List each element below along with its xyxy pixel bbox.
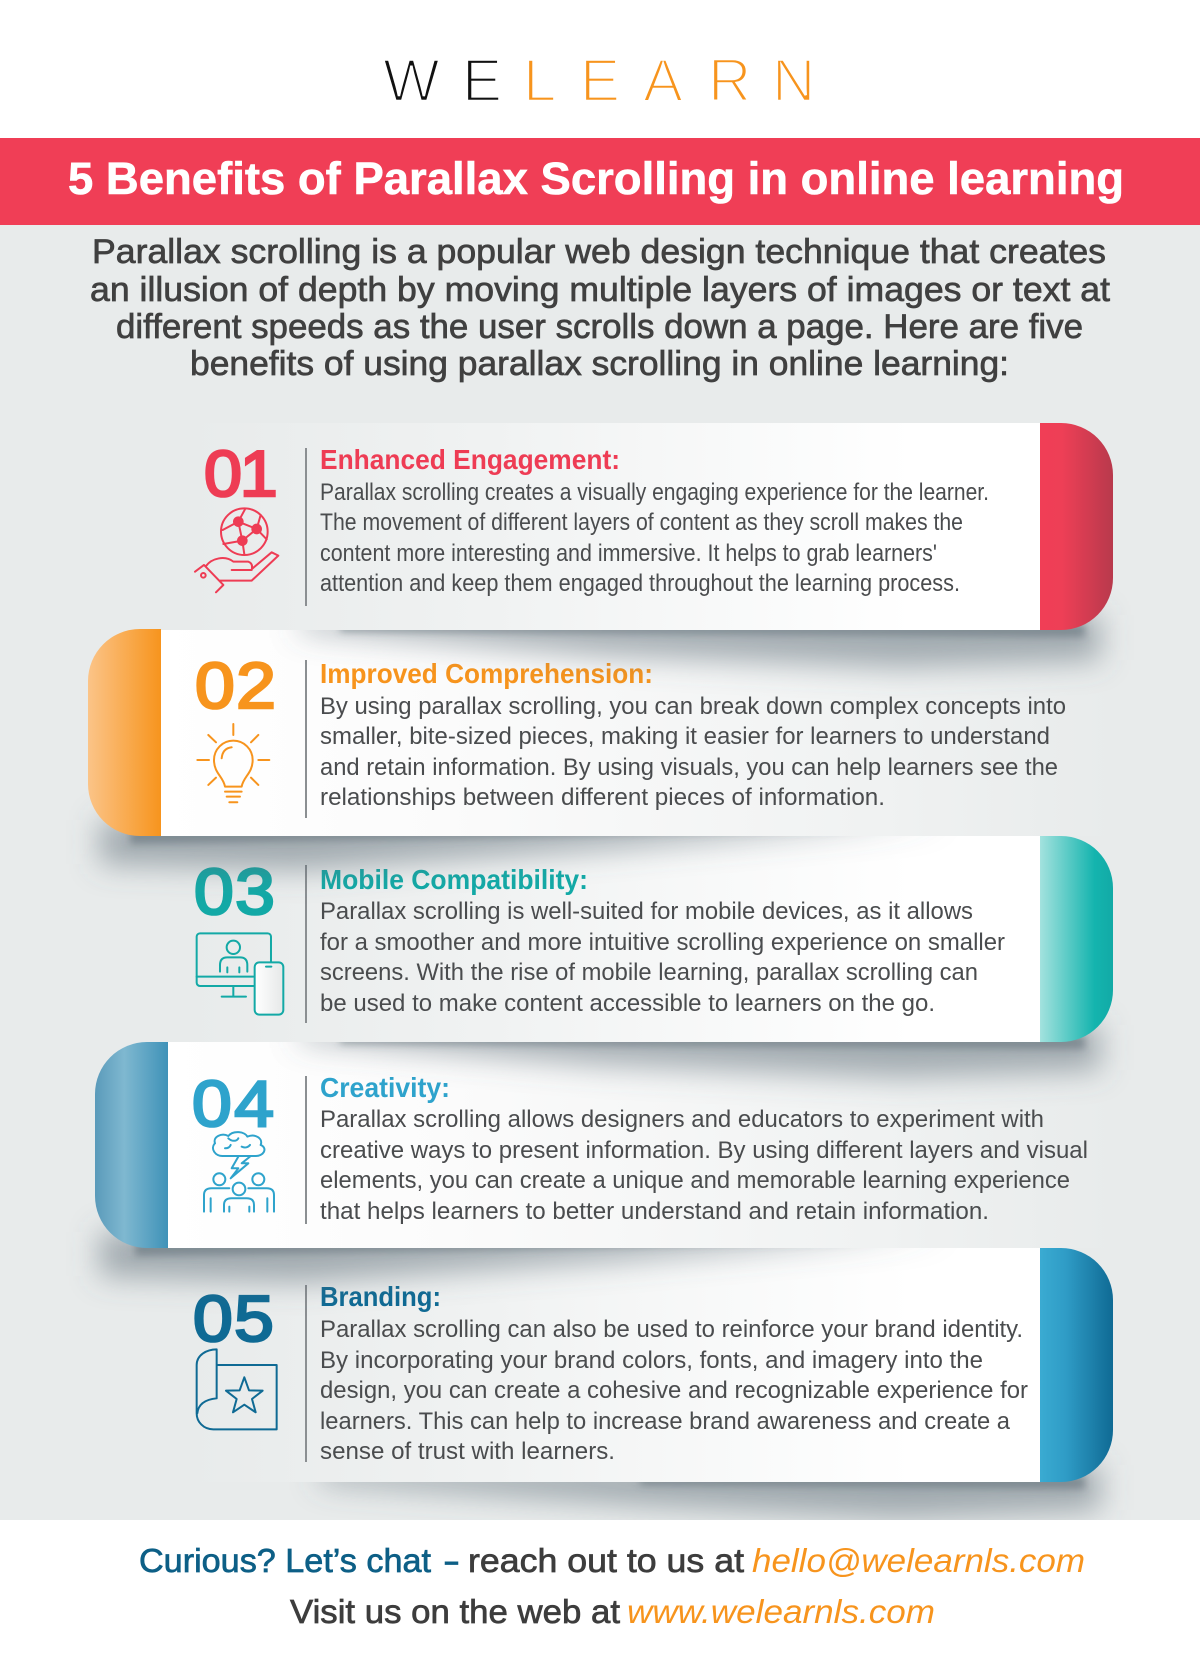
- panel: 03 Mobile Compatibility: [190, 836, 1113, 1042]
- body text 02: relationships between different pieces of information.: [320, 784, 885, 811]
- footer contact text: reach out to us at: [468, 1543, 745, 1580]
- body text 02: smaller, bite-sized pieces, making it easier for learners to understand: [320, 723, 1050, 750]
- logo: WELEARN: WE: [383, 47, 502, 114]
- number 02: 02: [195, 650, 276, 722]
- color cap 01: [1040, 423, 1113, 630]
- color cap 04: [95, 1042, 168, 1248]
- icon: brainstorm group: [204, 1132, 274, 1212]
- intro paragraph: [90, 233, 1110, 383]
- icon: hand holding network globe: [195, 508, 278, 592]
- body text 01: [320, 479, 989, 597]
- body text 02: and retain information. By using visuals, you can help learners see the: [320, 754, 1058, 781]
- number 05: 05: [193, 1283, 274, 1355]
- footer contact text: Visit us on the web at: [290, 1594, 621, 1631]
- heading: Enhanced Engagement: Enhanced Engagement:: [320, 444, 620, 475]
- body text 03: be used to make content accessible to learners on the go.: [320, 990, 935, 1017]
- body text 05: [320, 1316, 1028, 1465]
- body text 02: [320, 693, 1066, 811]
- intro paragraph: benefits of using parallax scrolling in online learning:: [190, 345, 1009, 383]
- body text 05: Parallax scrolling can also be used to reinforce your brand identity.: [320, 1316, 1023, 1343]
- heading: Mobile Compatibility: Mobile Compatibility:: [320, 864, 588, 895]
- icon: desktop and phone: [197, 933, 283, 1015]
- icon: scroll with star: [197, 1349, 277, 1429]
- color cap 05: [1040, 1248, 1113, 1482]
- body text 02: By using parallax scrolling, you can break down complex concepts into: [320, 693, 1066, 720]
- body text 05: learners. This can help to increase brand awareness and create a: [320, 1408, 1010, 1435]
- body text 05: By incorporating your brand colors, fonts, and imagery into the: [320, 1347, 983, 1374]
- body text 03: for a smoother and more intuitive scrolling experience on smaller: [320, 929, 1005, 956]
- footer contact text: www.welearnls.com: [627, 1594, 935, 1631]
- body text 04: elements, you can create a unique and memorable learning experience: [320, 1167, 1070, 1194]
- panel: 05 Branding: [190, 1248, 1113, 1482]
- panel: 02 Improved Comprehension: [88, 629, 1113, 836]
- body text 04: Parallax scrolling allows designers and educators to experiment with: [320, 1106, 1044, 1133]
- body text 01: attention and keep them engaged throughout the learning process.: [320, 570, 960, 597]
- body text 01: The movement of different layers of content as they scroll makes the: [320, 509, 963, 536]
- intro paragraph: Parallax scrolling is a popular web design technique that creates: [92, 233, 1106, 271]
- body text 03: screens. With the rise of mobile learning, parallax scrolling can: [320, 959, 978, 986]
- body text 05: sense of trust with learners.: [320, 1438, 615, 1465]
- heading: Improved Comprehension: Improved Comprehension:: [320, 658, 653, 689]
- title banner: [0, 138, 1200, 225]
- number 03: 03: [194, 856, 275, 928]
- body text 05: design, you can create a cohesive and recognizable experience for: [320, 1377, 1028, 1404]
- body text 04: [320, 1106, 1088, 1225]
- intro paragraph: an illusion of depth by moving multiple layers of images or text at: [90, 271, 1110, 309]
- heading: Branding: Branding:: [320, 1281, 441, 1312]
- color cap 03: [1040, 836, 1113, 1042]
- number 04: 04: [192, 1068, 274, 1140]
- heading: Creativity: Creativity:: [320, 1072, 450, 1103]
- body text 03: [320, 898, 1005, 1017]
- icon: light bulb: [197, 724, 269, 802]
- body text 04: that helps learners to better understand and retain information.: [320, 1198, 989, 1225]
- footer contact text: -: [443, 1543, 460, 1580]
- logo: WELEARN: LEARN: [523, 47, 815, 114]
- footer contact text: Curious? Let’s chat: [139, 1543, 432, 1580]
- body text 04: creative ways to present information. By using different layers and visual: [320, 1137, 1088, 1164]
- panel: 04 Creativity: [95, 1042, 1113, 1248]
- body text 03: Parallax scrolling is well-suited for mobile devices, as it allows: [320, 898, 973, 925]
- number 01: 01: [204, 438, 278, 511]
- footer contact text: hello@welearnls.com: [752, 1543, 1085, 1580]
- color cap 02: [88, 629, 161, 836]
- panel: 01 Enhanced Engagement: [190, 423, 1113, 630]
- footer contact text: [139, 1543, 1085, 1631]
- title banner: 5 Benefits of Parallax Scrolling in online learning: [68, 153, 1124, 204]
- body text 01: Parallax scrolling creates a visually engaging experience for the learner.: [320, 479, 989, 506]
- intro paragraph: different speeds as the user scrolls down a page. Here are five: [116, 308, 1083, 346]
- body text 01: content more interesting and immersive. It helps to grab learners': [320, 540, 937, 567]
